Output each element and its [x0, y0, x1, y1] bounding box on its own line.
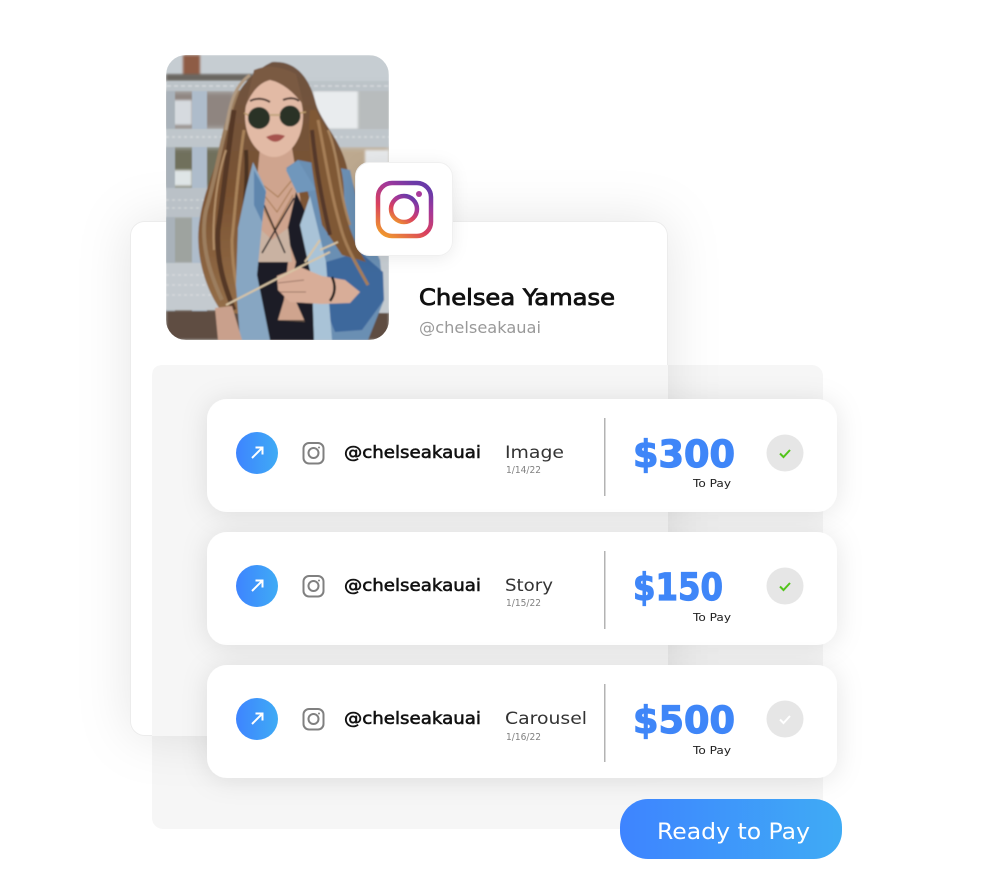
handle: @chelseakauai: [344, 576, 481, 596]
profile name: Chelsea Yamase: [419, 286, 615, 311]
necklaces: [262, 180, 293, 230]
to pay label: To Pay: [692, 477, 732, 490]
amount: $150: [633, 566, 723, 609]
content type: Carousel: [505, 709, 587, 729]
amount: $300: [633, 433, 735, 476]
profile photo: [166, 55, 389, 340]
neck and chest: [257, 148, 305, 322]
date: 1/14/22: [506, 465, 541, 476]
icon: instagram outline: [304, 709, 324, 730]
white profile card: [130, 222, 668, 736]
row: story payment: [207, 532, 837, 645]
icon: instagram outline: [304, 443, 324, 464]
instagram badge: [356, 162, 452, 256]
denim jacket right: [286, 160, 384, 340]
icon: blue arrow button: [236, 565, 278, 607]
date: 1/16/22: [506, 732, 541, 743]
forearm and hand: [277, 267, 360, 304]
icon: pending check: [766, 700, 804, 738]
gray panel overlap on card: [152, 365, 668, 736]
denim jacket left: [236, 162, 270, 340]
dried grass: [226, 240, 338, 305]
lace top: [257, 226, 292, 262]
to pay label: To Pay: [692, 611, 732, 624]
icon: blue arrow button: [236, 698, 278, 740]
hair over jacket: [309, 110, 368, 285]
content type: Image: [505, 443, 564, 463]
icon: instagram logo: [378, 183, 431, 236]
ready to pay button: Ready to Pay: [657, 820, 810, 845]
ready to pay button: [620, 799, 842, 859]
icon: blue arrow button: [236, 432, 278, 474]
icon: green check: [766, 434, 804, 472]
black top: [271, 192, 314, 340]
icon: green check: [766, 568, 804, 604]
icon: instagram outline: [304, 576, 324, 596]
face: [245, 75, 303, 157]
profile handle: @chelseakauai: [419, 318, 541, 337]
gray background panel: [152, 365, 823, 829]
row: image payment: [207, 399, 837, 512]
date: 1/15/22: [506, 598, 541, 609]
handle: @chelseakauai: [344, 709, 481, 729]
amount: $500: [633, 699, 735, 742]
handle: @chelseakauai: [344, 443, 481, 463]
hair: [197, 61, 355, 314]
to pay label: To Pay: [692, 744, 732, 757]
content type: Story: [505, 576, 553, 596]
row: carousel payment: [207, 665, 837, 778]
